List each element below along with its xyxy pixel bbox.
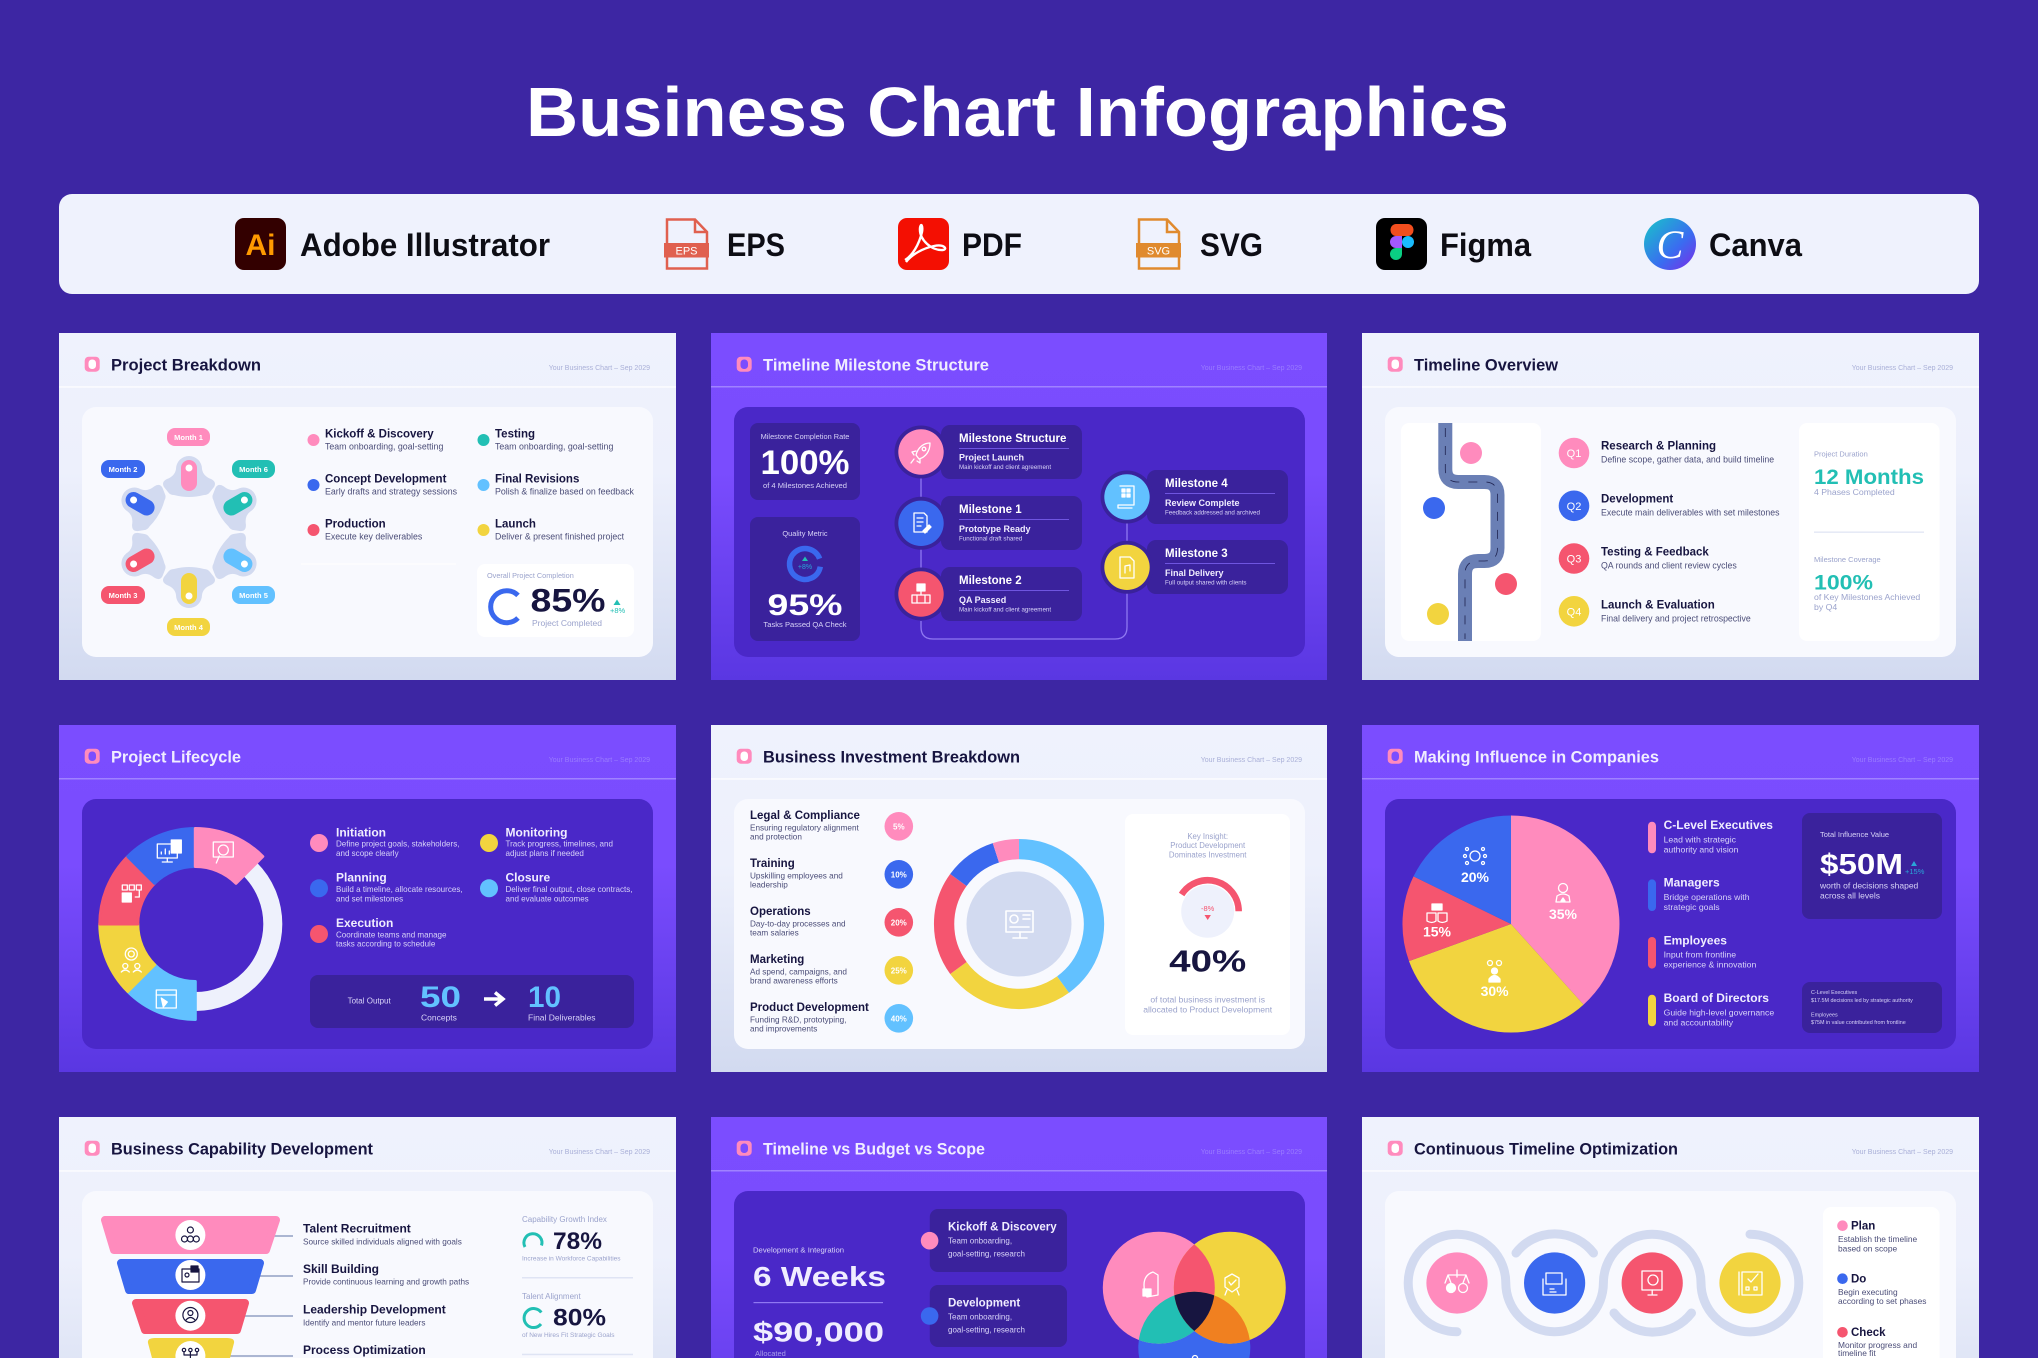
callout: key insight: Product Development [1170,841,1246,850]
card: Kickoff and Discovery: Kickoff & Discovery [948,1222,1057,1234]
label: Canva: Canva [1709,227,1802,263]
legend: lifecycle stages: Closure [506,871,551,885]
callout: total output: Final Deliverables [528,1013,596,1023]
list: capability steps: Leadership Development [303,1303,446,1317]
callout: value notes [1802,982,1942,1033]
icon: SVG file [1136,220,1181,268]
panel: Timeline Overview [1362,333,1979,680]
icon: header badge [1388,357,1403,372]
legend: influence groups: authority and vision [1664,844,1739,854]
stat: quality metric: 95% [768,589,842,622]
milestone: Milestone 4: Review Complete [1165,498,1240,508]
milestone: Milestone 4: Feedback addressed and archived [1165,509,1260,516]
stat: talent alignment: Talent Alignment [522,1292,581,1301]
heading: Timeline Overview [1414,356,1559,374]
callout: total output: Concepts [421,1013,457,1023]
list: investment categories: 25% [891,966,907,975]
legend: lifecycle stages: Track progress, timelines, and [506,840,613,849]
list: capability steps: Source skilled individuals aligned with goals [303,1237,462,1246]
legend: plan do check: Plan [1851,1220,1875,1232]
list: investment categories: 5% [893,822,905,831]
chart: influence pie: 35% [1549,906,1578,922]
chart: road map [1401,423,1541,641]
icon: process [182,1348,199,1358]
heading: Timeline Milestone Structure [763,356,989,374]
milestone: Milestone Structure: Main kickoff and client agreement [959,464,1051,471]
icon: team [1488,960,1502,982]
callout: key insight: of total business investment is [1150,994,1265,1004]
legend: influence groups [1648,818,1774,1027]
legend: influence groups: Lead with strategic [1664,834,1737,844]
list: quarterly phases: Q2 [1567,501,1581,513]
icon: monitoring [121,948,141,972]
chart: six month wheel: Month 3 [109,591,137,600]
icon: executive [1556,884,1570,902]
legend: influence groups: Input from frontline [1664,950,1736,960]
callout: overall completion [477,564,634,637]
callout: overall completion: Overall Project Completion [487,571,574,580]
icon: execution [122,885,141,902]
milestone: Milestone 3 [1100,540,1288,594]
callout: overall completion: Project Completed [532,618,602,628]
icon: network [1464,848,1486,864]
legend: lifecycle stages: Build a timeline, allocate resources, [336,885,463,894]
callout: total output: 10 [528,981,561,1014]
milestone: Milestone 2: QA Passed [959,595,1006,605]
stat: capability growth index: 78% [553,1228,602,1255]
callout: value notes: C-Level Executives [1811,990,1857,996]
chart: six month wheel: Month 2 [109,465,137,474]
icon: PDF [898,218,949,270]
callout: key insight: allocated to Product Development [1143,1004,1273,1014]
icon: monitor chart [1006,911,1033,938]
legend: project phases: Final Revisions [495,474,579,486]
legend: plan do check: according to set phases [1838,1296,1926,1306]
list: investment categories: Legal & Compliance [750,810,860,822]
icon: leadership [183,1308,198,1322]
panel: Timeline Milestone Structure [711,333,1327,680]
list: quarterly phases: Research & Planning [1601,440,1716,452]
list: capability steps: Process Optimization [303,1343,426,1357]
list: investment categories: leadership [750,881,788,890]
list: investment categories: Marketing [750,954,804,966]
legend: lifecycle stages: adjust plans if needed [506,849,584,858]
stats: duration and coverage: Project Duration [1814,450,1868,459]
milestone: Milestone 2 [894,567,1082,621]
callout: overall completion: +8% [610,606,626,615]
icon: EPS file: EPS [675,246,698,258]
icon: Adobe Illustrator [235,218,286,270]
legend: plan do check: based on scope [1838,1243,1897,1253]
icon: Canva: C [1657,222,1685,267]
icon: EPS file [664,220,709,268]
milestone: Milestone 3: Final Delivery [1165,568,1224,578]
list: capability steps: Provide continuous learning and growth paths [303,1278,469,1287]
chart: PDCA wave [1408,1234,1799,1332]
list: investment categories: brand awareness efforts [750,977,838,986]
stat: completion rate [750,423,860,500]
list: quarterly phases: Q4 [1567,606,1581,618]
stats: duration and coverage: of Key Milestones Achieved [1814,592,1920,602]
chart: influence pie: 20% [1461,869,1490,885]
legend: project phases: Polish & finalize based on feedback [495,486,634,496]
stat: capability growth index [522,1215,633,1278]
legend: influence groups: Employees [1664,933,1727,947]
panel: Making Influence in Companies [1362,725,1979,1072]
panel: Continuous Timeline Optimization [1362,1117,1979,1358]
list: quarterly phases: Q3 [1567,554,1581,566]
list: capability steps: Talent Recruitment [303,1222,411,1236]
stats: weeks and budget: Allocated [755,1349,786,1358]
list: investment categories: Funding R&D, prototyping, [750,1015,846,1024]
list: investment categories: Training [750,858,795,870]
icon: planning [157,840,181,862]
chart: investment donut [944,849,1094,999]
stats: weeks and budget: 6 Weeks [753,1261,886,1292]
chart: influence pie [1402,816,1619,1033]
stats: duration and coverage: 100% [1814,572,1873,595]
stat: quality metric: Tasks Passed QA Check [763,620,847,629]
legend: project phases: Launch [495,518,536,530]
callout: key insight [1125,814,1290,1035]
date: Your Business Chart – Sep 2029 [549,365,650,372]
stats: duration and coverage: Milestone Coverage [1814,555,1881,564]
heading: Business Capability Development [111,1140,373,1158]
list: investment categories: 10% [891,870,907,879]
stat: completion rate: of 4 Milestones Achieved [763,481,847,490]
icon: header badge [737,1141,752,1156]
label: Adobe Illustrator: Adobe Illustrator [300,227,550,263]
list: investment categories: Ensuring regulatory alignment [750,823,859,832]
icon: puzzle [1143,1272,1158,1297]
chart: influence pie: 15% [1423,924,1452,940]
icon: Canva [1644,218,1696,270]
list: investment categories [750,810,913,1034]
milestone: Milestone Structure: Project Launch [959,453,1024,463]
list: investment categories: 20% [891,918,907,927]
callout: key insight: 40% [1169,944,1246,979]
list: quarterly phases: Define scope, gather data, and build timeline [1601,454,1774,464]
legend: project phases: Concept Development [325,474,447,486]
milestone: Milestone 4 [1100,470,1288,524]
stat: talent alignment: 80% [553,1305,606,1332]
heading: Project Lifecycle [111,748,241,766]
milestone: Milestone Structure [894,425,1082,479]
legend: plan do check: Monitor progress and [1838,1340,1917,1350]
stat: quality metric [750,517,860,641]
callout: overall completion: 85% [530,583,606,619]
icon: scope pin [1192,1356,1198,1358]
callout: value notes: $17.5M decisions led by strategic authority [1811,998,1913,1004]
icon: badge [1225,1274,1239,1295]
list: quarterly phases: Final delivery and project retrospective [1601,614,1751,624]
panel: Business Capability Development [59,1117,676,1358]
heading: Making Influence in Companies [1414,748,1659,766]
legend: lifecycle stages: Initiation [336,826,386,840]
stats: weeks and budget: Development & Integration [753,1246,844,1255]
legend: lifecycle stages: Deliver final output, close contracts, [506,885,633,894]
icon: Adobe Illustrator: Ai [246,229,276,262]
icon: recruitment [182,1227,199,1242]
legend: influence groups: experience & innovation [1664,960,1756,970]
legend: project phases: Deliver & present finished project [495,532,625,542]
icon: SVG file: SVG [1147,246,1170,258]
legend: project phases: Early drafts and strategy sessions [325,486,458,496]
legend: project phases [301,429,634,564]
legend: project phases: Team onboarding, goal-setting [495,442,613,452]
list: capability steps [303,1222,469,1357]
milestone: Milestone 1: Prototype Ready [959,524,1031,534]
icon: feedback [1427,904,1447,922]
legend: plan do check: Establish the timeline [1838,1234,1917,1244]
stat: completion rate: 100% [760,444,850,482]
title: Business Chart Infographics [526,73,1509,151]
card: Development: Development [948,1297,1020,1309]
card: Development [921,1285,1067,1347]
stat: quality metric: +8% [798,564,812,571]
chart: influence pie: 30% [1481,983,1509,999]
date: Your Business Chart – Sep 2029 [1201,365,1302,372]
icon: monitor target [1642,1271,1662,1295]
legend: lifecycle stages: Define project goals, stakeholders, [336,840,459,849]
date: Your Business Chart – Sep 2029 [1852,757,1953,764]
legend: lifecycle stages [310,826,633,949]
icon: checklist [1739,1272,1762,1295]
list: investment categories: Upskilling employees and [750,871,843,880]
list: quarterly phases: Launch & Evaluation [1601,600,1715,612]
card: Development: Team onboarding, [948,1312,1012,1321]
icon: header badge [85,749,100,764]
legend: project phases: Team onboarding, goal-setting [325,442,443,452]
legend: plan do check: Begin executing [1838,1287,1898,1297]
icon: balance [1445,1270,1469,1292]
card: Kickoff and Discovery: Team onboarding, [948,1237,1012,1246]
stats: duration and coverage [1799,423,1940,641]
label: PDF: PDF [962,227,1022,263]
icon: header badge [1388,749,1403,764]
card: Kickoff and Discovery [921,1209,1067,1272]
chart: venn diagram [1103,1232,1286,1358]
icon: header badge [737,749,752,764]
callout: total influence value [1802,813,1942,919]
panel: Business Investment Breakdown [711,725,1327,1072]
legend: influence groups: Board of Directors [1664,991,1769,1005]
chart: lifecycle ring [100,828,273,1020]
callout: total output [310,975,634,1028]
stat: capability growth index: Capability Growth Index [522,1215,607,1224]
milestone: Milestone Structure: Milestone Structure [959,433,1066,445]
list: investment categories: Product Development [750,1002,869,1014]
stats: duration and coverage: 12 Months [1814,466,1924,489]
date: Your Business Chart – Sep 2029 [1201,1149,1302,1156]
stats: duration and coverage: 4 Phases Completed [1814,487,1895,497]
list: quarterly phases: Development [1601,494,1673,506]
legend: plan do check: Check [1851,1327,1886,1339]
label: EPS: EPS [727,227,785,263]
panel: software format strip [59,194,1979,294]
legend: lifecycle stages: tasks according to schedule [336,940,436,949]
legend: lifecycle stages: Monitoring [506,826,567,840]
stats: weeks and budget: $90,000 [753,1317,884,1348]
callout: total influence value: $50M [1820,849,1903,881]
legend: lifecycle stages: and scope clearly [336,849,399,858]
list: investment categories: Operations [750,906,811,918]
stat: capability growth index: Increase in Workforce Capabilities [522,1255,621,1262]
legend: lifecycle stages: Planning [336,871,387,885]
date: Your Business Chart – Sep 2029 [549,1149,650,1156]
legend: influence groups: strategic goals [1664,902,1720,912]
callout: total influence value: +15% [1905,867,1925,876]
heading: Timeline vs Budget vs Scope [763,1140,985,1158]
legend: lifecycle stages: and evaluate outcomes [506,894,589,903]
legend: influence groups: Bridge operations with [1664,892,1750,902]
chart: six month wheel: Month 5 [239,591,268,600]
stat: talent alignment [522,1292,633,1355]
list: quarterly phases: Q1 [1567,448,1581,460]
stat: talent alignment: of New Hires Fit Strategic Goals [522,1332,615,1339]
legend: plan do check: Do [1851,1273,1866,1285]
milestone: Milestone 2: Milestone 2 [959,575,1022,587]
legend: project phases: Production [325,518,386,530]
milestone: Milestone 3: Milestone 3 [1165,548,1228,560]
list: investment categories: 40% [891,1014,907,1023]
stat: quality metric: Quality Metric [782,529,828,538]
date: Your Business Chart – Sep 2029 [549,757,650,764]
callout: value notes: $75M in value contributed from frontline [1811,1020,1906,1026]
icon: header badge [85,357,100,372]
callout: key insight: -8% [1201,904,1215,913]
panel: Timeline vs Budget vs Scope [711,1117,1327,1358]
legend: lifecycle stages: Execution [336,916,393,930]
list: investment categories: team salaries [750,929,799,938]
callout: total influence value: across all levels [1820,891,1880,901]
heading: Business Investment Breakdown [763,748,1020,766]
callout: total influence value: worth of decisions shaped [1819,881,1919,891]
list: quarterly phases: Testing & Feedback [1601,546,1709,558]
connector path [921,473,1127,639]
panel: Project Breakdown [59,333,676,680]
date: Your Business Chart – Sep 2029 [1852,365,1953,372]
chart: capability funnel [105,1220,293,1358]
callout: total output: Total Output [348,997,392,1006]
list: quarterly phases [1559,438,1780,627]
icon: send [1543,1273,1566,1295]
callout: total output: 50 [420,981,461,1014]
list: capability steps: Skill Building [303,1262,379,1276]
icon: header badge [1388,1141,1403,1156]
heading: Continuous Timeline Optimization [1414,1140,1678,1158]
legend: project phases: Execute key deliverables [325,532,423,542]
legend: plan do check: timeline fit [1838,1348,1876,1358]
icon: skill card [182,1266,199,1282]
icon: closure [156,990,176,1008]
heading: Project Breakdown [111,356,261,374]
legend: influence groups: and accountability [1664,1017,1734,1027]
legend: plan do check [1823,1207,1940,1358]
list: capability steps: Identify and mentor future leaders [303,1318,425,1327]
callout: total influence value: Total Influence Value [1820,830,1889,839]
legend: project phases: Testing [495,429,535,441]
date: Your Business Chart – Sep 2029 [1852,1149,1953,1156]
stat: completion rate: Milestone Completion Rate [761,432,849,441]
legend: influence groups: Guide high-level governance [1664,1007,1774,1017]
milestone: Milestone 2: Main kickoff and client agreement [959,606,1051,613]
chart: six month wheel [101,428,275,636]
callout: key insight: Dominates Investment [1169,850,1247,859]
list: quarterly phases: Execute main deliverables with set milestones [1601,508,1780,518]
card: Development: goal-setting, research [948,1325,1025,1334]
date: Your Business Chart – Sep 2029 [1201,757,1302,764]
legend: lifecycle stages: and set milestones [336,894,403,903]
list: quarterly phases: QA rounds and client review cycles [1601,560,1737,570]
callout: key insight: Key Insight: [1187,832,1228,841]
icon: header badge [85,1141,100,1156]
legend: influence groups: Managers [1664,876,1720,890]
stats: weeks and budget [753,1246,886,1358]
legend: influence groups: C-Level Executives [1664,818,1773,832]
list: investment categories: and improvements [750,1025,817,1034]
milestone: Milestone 3: Full output shared with clients [1165,579,1247,586]
legend: project phases: Kickoff & Discovery [325,429,434,441]
milestone: Milestone 1 [894,496,1082,550]
stats: duration and coverage: by Q4 [1814,602,1837,612]
list: investment categories: Ad spend, campaigns, and [750,967,847,976]
milestone: Milestone 4: Milestone 4 [1165,478,1228,490]
icon: Figma [1376,218,1427,270]
chart: six month wheel: Month 6 [239,465,268,474]
list: investment categories: and protection [750,833,802,842]
panel: Project Lifecycle [59,725,676,1072]
milestone: Milestone 1: Functional draft shared [959,535,1023,542]
callout: value notes: Employees [1811,1013,1838,1019]
chart: six month wheel: Month 4 [174,623,204,632]
milestone: Milestone 1: Milestone 1 [959,504,1022,516]
label: SVG: SVG [1200,227,1263,263]
label: Figma: Figma [1440,227,1531,263]
icon: initiation [213,842,233,863]
icon: header badge [737,357,752,372]
legend: lifecycle stages: Coordinate teams and manage [336,931,447,940]
card: Kickoff and Discovery: goal-setting, research [948,1250,1025,1259]
list: investment categories: Day-to-day processes and [750,919,846,928]
chart: six month wheel: Month 1 [174,433,203,442]
